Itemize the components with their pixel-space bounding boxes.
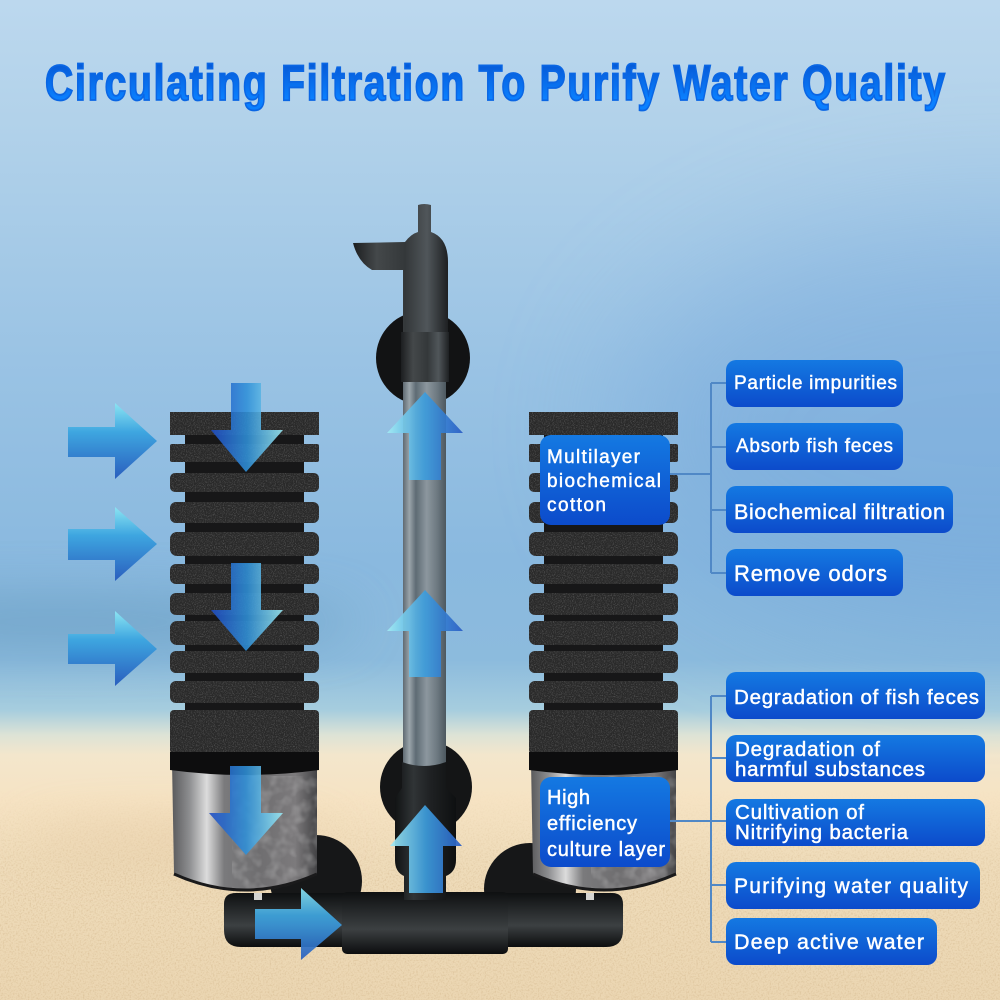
callout: multilayer biochemical cotton: biochemical (547, 471, 661, 492)
arrow: down bottom (209, 766, 283, 855)
label: deep active water: Deep active water (734, 930, 924, 954)
suction cup: left base (270, 835, 362, 927)
label: cultivation of nitrifying bacteria (726, 799, 985, 846)
label: particle impurities: Particle impurities (734, 373, 897, 394)
U-shaped base pipe (224, 892, 623, 954)
callout: multilayer biochemical cotton (540, 435, 670, 525)
right sponge filter (529, 412, 678, 891)
label: degradation of harmful substances (726, 735, 985, 782)
label: particle impurities (726, 360, 903, 407)
arrow: base pipe flow (255, 888, 342, 960)
arrow: inflow bottom (68, 611, 157, 686)
label: absorb fish feces (726, 423, 903, 470)
suction cup: right base (484, 843, 576, 935)
callout: high efficiency culture layer: High (547, 787, 590, 809)
arrow: up bottom (390, 805, 462, 893)
label: biochemical filtration (726, 486, 953, 533)
arrow: inflow top (68, 403, 157, 479)
connector lines: culture group (670, 696, 726, 942)
lower connector (395, 762, 456, 900)
title: Circulating Filtration To Purify Water Quality (45, 54, 945, 111)
callout: high efficiency culture layer: efficiency (547, 813, 637, 835)
callout: high efficiency culture layer: culture layer (547, 839, 665, 861)
arrow: down top (211, 383, 283, 472)
central lift tube assembly (353, 204, 472, 900)
callout: multilayer biochemical cotton: cotton (547, 495, 606, 516)
arrow: inflow middle (68, 507, 157, 581)
label: degradation of fish feces (726, 672, 985, 719)
label: purifying water quality (726, 862, 980, 909)
upper sleeve (401, 332, 449, 382)
callout: high efficiency culture layer (540, 777, 670, 867)
suction cup: lower (380, 741, 472, 833)
label: deep active water (726, 918, 937, 965)
label: purifying water quality: Purifying water quality (734, 875, 968, 898)
suction cup: upper (376, 311, 470, 405)
clear tube (403, 380, 446, 775)
arrow: down middle (211, 563, 283, 651)
arrow: up middle (387, 590, 463, 677)
callout: multilayer biochemical cotton: Multilayer (547, 447, 641, 468)
label: degradation of harmful substances: Degradation of (735, 738, 880, 761)
outlet nozzle (353, 204, 448, 333)
label: absorb fish feces: Absorb fish feces (736, 436, 893, 457)
connector lines: cotton group (670, 383, 726, 573)
label: cultivation of nitrifying bacteria: Nitrifying bacteria (735, 821, 909, 844)
arrow: up top (387, 392, 463, 480)
left sponge filter (170, 412, 319, 891)
label: degradation of harmful substances: harmful substances (735, 758, 925, 781)
label: remove odors: Remove odors (734, 561, 887, 586)
label: biochemical filtration: Biochemical filtration (734, 500, 945, 524)
label: degradation of fish feces: Degradation of fish feces (734, 686, 979, 709)
label: remove odors (726, 549, 903, 596)
label: cultivation of nitrifying bacteria: Cultivation of (735, 801, 864, 824)
